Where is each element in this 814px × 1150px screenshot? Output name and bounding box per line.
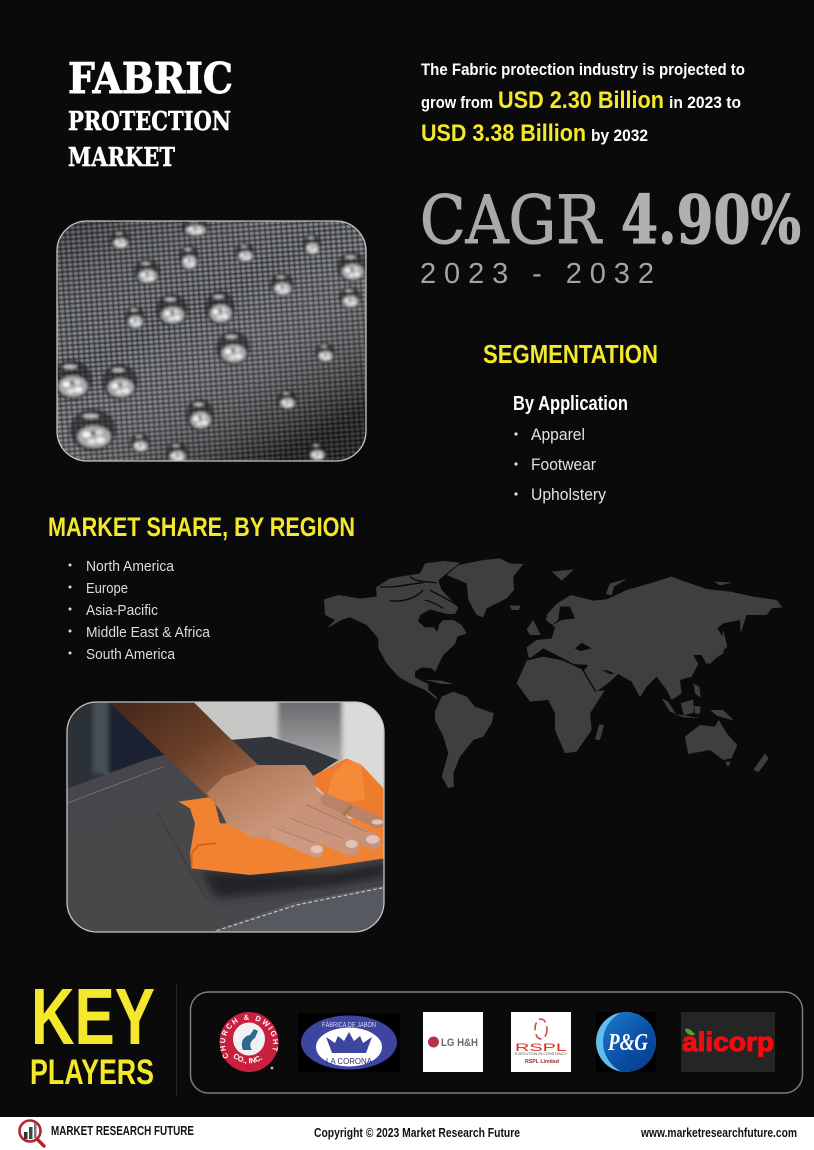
heading: key players: KEY: [31, 972, 155, 1061]
market size summary text: grow from: [421, 93, 493, 112]
region list: South America: [86, 646, 176, 663]
icon: market research future logo: [20, 1120, 44, 1146]
logo: LG H&H: [423, 1012, 483, 1072]
heading: segmentation: SEGMENTATION: [483, 339, 658, 369]
market size summary text: USD 3.38 Billion: [421, 120, 586, 147]
logo: La Corona: [298, 1013, 400, 1072]
logo: LG H&H: LG H&H: [441, 1037, 478, 1049]
logo: RSPL: RSPL: [515, 1042, 567, 1054]
logo: RSPL: EXECUTION IN CONSTANCY: [515, 1052, 568, 1056]
CAGR figure: 2023 - 2032: [420, 258, 654, 290]
region list: Middle East & Africa: [86, 624, 211, 641]
region list: North America: [86, 558, 175, 575]
title: [68, 54, 233, 173]
heading: market share by region: MARKET SHARE, BY REGION: [48, 512, 355, 542]
footer bar: [0, 1117, 814, 1150]
heading: key players: [30, 972, 155, 1092]
heading: key players: PLAYERS: [30, 1053, 154, 1092]
market size summary text: USD 2.30 Billion: [498, 87, 664, 114]
market size summary text: The Fabric protection industry is projected to: [421, 60, 745, 79]
market size summary text: by 2032: [591, 126, 648, 145]
segmentation list: By Application: [513, 393, 628, 415]
logo: P&G: [596, 1012, 656, 1072]
region list: [68, 558, 211, 663]
photo: hand wiping car seat with orange cloth: [60, 690, 390, 937]
segmentation list: Upholstery: [531, 485, 606, 504]
segmentation list: [513, 393, 628, 504]
logo: Alicorp: [681, 1012, 775, 1072]
footer copyright: Copyright © 2023 Market Research Future: [314, 1126, 520, 1140]
logo: RSPL: [511, 1012, 571, 1072]
footer brand name: MARKET RESEARCH FUTURE: [51, 1124, 194, 1138]
photo: water droplets on fabric: [52, 217, 367, 464]
logo: La Corona: LA CORONA: [326, 1056, 372, 1066]
title: FABRIC: [68, 54, 233, 103]
CAGR figure: CAGR: [420, 182, 603, 259]
region list: Asia-Pacific: [86, 602, 158, 619]
region list: Europe: [86, 580, 128, 597]
title: PROTECTION: [68, 107, 231, 137]
logo: Church & Dwight: CO., INC.: [234, 1054, 262, 1064]
market size summary text: [421, 60, 745, 147]
logo: Alicorp: alicorp: [682, 1027, 774, 1057]
segmentation list: Apparel: [531, 425, 585, 444]
title: MARKET: [68, 143, 176, 173]
market size summary text: in 2023 to: [669, 93, 741, 112]
world map: [324, 558, 783, 788]
logo: Church & Dwight: CHURCH & DWIGHT: [220, 1014, 278, 1058]
logo: La Corona: FÁBRICA DE JABÓN: [322, 1020, 376, 1029]
CAGR figure: [420, 181, 801, 290]
panel: key player logos: [190, 991, 804, 1094]
logo: RSPL: RSPL Limited: [525, 1059, 559, 1065]
logo: P&G: P&G: [607, 1030, 649, 1056]
segmentation list: Footwear: [531, 455, 596, 474]
